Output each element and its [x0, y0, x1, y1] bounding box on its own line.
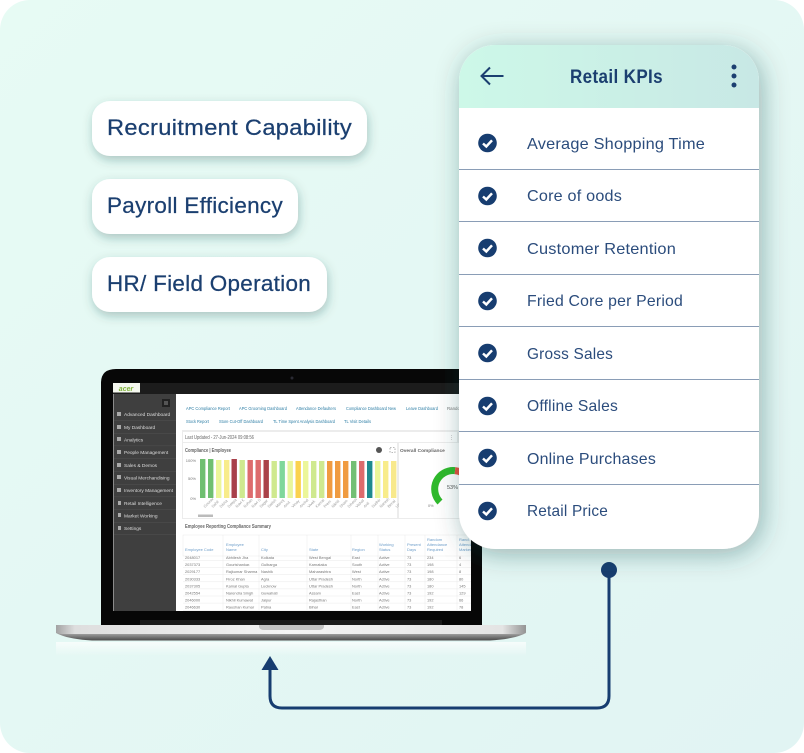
compliance bar chart card [183, 443, 404, 518]
logo: acer [119, 386, 134, 393]
compliance bar chart card: 100% [186, 458, 196, 463]
tabs: Leave Dashboard [406, 406, 439, 411]
rotated axis labels: Anil [363, 501, 370, 509]
list item: Online Purchases [478, 449, 656, 468]
employee compliance table: 192 [427, 598, 434, 603]
rotated axis labels: Nikhil [331, 499, 340, 509]
employee compliance table: Narendra Singh [226, 590, 253, 596]
employee compliance table: Present [407, 542, 422, 547]
list item: Offline Sales [478, 397, 618, 415]
employee compliance table: Rajkumar Sharma [226, 569, 258, 574]
list item: Average Shopping Time [478, 134, 705, 153]
employee compliance table: 73 [407, 555, 411, 560]
employee compliance table: 73 [407, 605, 411, 610]
employee compliance table: Days [407, 547, 416, 552]
rotated axis labels: Deepa [227, 497, 238, 509]
employee compliance table: Employee Code [185, 547, 214, 552]
employee compliance table: State [309, 547, 319, 552]
employee compliance table: 73 [407, 569, 411, 574]
logo [112, 383, 140, 393]
dashboard screen [112, 383, 480, 611]
employee compliance table: Random [427, 537, 443, 542]
list item: Online Purchases: Online Purchases [527, 451, 656, 468]
employee compliance table: Agra [261, 576, 270, 581]
employee compliance table: North [352, 576, 362, 581]
pill: Payroll Efficiency [92, 179, 298, 234]
employee compliance table: 2037373 [185, 562, 200, 567]
overall compliance gauge card: Overall Compliance [400, 448, 445, 454]
icon: back arrow [482, 68, 504, 84]
employee compliance table: Patna [261, 605, 272, 610]
pill: Recruitment Capability: Recruitment Capability [107, 115, 352, 140]
rotated axis labels: Arvind [299, 498, 309, 509]
employee compliance table: Active [379, 555, 390, 560]
sidebar: Settings [124, 526, 142, 532]
top bar [113, 383, 471, 394]
employee compliance table: 129 [459, 590, 466, 596]
rotated axis labels: Sagar [259, 498, 269, 509]
sidebar: Sales & Demos [124, 463, 158, 469]
employee compliance table: 2030333 [185, 576, 200, 581]
employee compliance table: Rajasthan [309, 598, 327, 603]
employee compliance table: 2046630 [185, 605, 201, 610]
laptop hinge strip [140, 620, 442, 625]
list item: Offline Sales: Offline Sales [527, 398, 618, 415]
list item: Customer Retention: Customer Retention [527, 241, 676, 258]
sidebar: Market Working [124, 514, 158, 520]
employee compliance table: Active [379, 562, 390, 567]
overall compliance gauge card: 0% [428, 504, 434, 508]
list item: Customer Retention [478, 239, 676, 258]
employee compliance table: 2048017 [185, 555, 200, 560]
employee compliance table: 145 [459, 583, 466, 588]
rotated axis labels: Ravi K [235, 498, 246, 509]
rotated axis labels: Vinay [291, 499, 300, 509]
employee compliance table: 2042554 [185, 590, 201, 596]
last updated bar [183, 432, 457, 442]
tabs: Compliance Dashboard New [346, 406, 397, 411]
list item: Core of oods: Core of oods [527, 188, 622, 205]
employee compliance table: 198 [427, 569, 434, 574]
pill: Payroll Efficiency: Payroll Efficiency [107, 193, 283, 218]
employee compliance table [182, 519, 480, 611]
employee compliance table: 2046000 [185, 598, 201, 603]
employee compliance table: Kolkata [261, 555, 275, 560]
rotated axis labels: Naresh [379, 497, 390, 509]
list item: Retail Price [478, 502, 608, 520]
rotated axis labels: Gourav [203, 497, 215, 509]
employee compliance table: Attendance [459, 542, 480, 547]
employee compliance table: Guwahati [261, 590, 278, 596]
tabs: Attendance Defaulters [296, 406, 337, 411]
employee compliance table: East [352, 605, 361, 610]
list item: Retail Price: Retail Price [527, 503, 608, 520]
icon: menu dots [732, 64, 736, 88]
employee compliance table: 180 [427, 576, 434, 581]
sidebar: My Dashboard [124, 425, 156, 431]
rotated axis labels: Sham [339, 499, 349, 509]
tabs: TL Time Spent Analysis Dashboard [273, 419, 335, 424]
employee compliance table: Name [226, 547, 237, 552]
rotated axis labels: Satish [267, 498, 277, 509]
rotated axis labels: Dinesh [347, 498, 358, 509]
tabs: Stock Report [186, 419, 210, 424]
employee compliance table: Kamal Gupta [226, 583, 250, 588]
employee compliance table: Bihar [309, 605, 319, 610]
employee compliance table: North [352, 583, 362, 588]
employee compliance table: 192 [427, 605, 434, 610]
employee compliance table: Assam [309, 590, 321, 596]
last updated bar: Last Updated - 27-Jun-2024 09:08:56 [185, 435, 254, 441]
employee compliance table: East [352, 555, 361, 560]
last updated bar: ⋮ [449, 435, 454, 441]
tabs: Random [447, 406, 464, 411]
employee compliance table: Active [379, 605, 390, 610]
panel: Retail KPIs card [459, 45, 759, 549]
employee compliance table: Uttar Pradesh [309, 576, 333, 581]
employee compliance table: Jaipur [261, 598, 272, 603]
employee compliance table: Employee Reporting Compliance Summary [185, 524, 271, 530]
list item: Fried Core per Period [478, 292, 683, 310]
employee compliance table: Employee [226, 542, 245, 547]
sidebar: Retail Intelligence [124, 501, 162, 507]
employee compliance table: Gulbarga [261, 562, 278, 567]
rotated axis labels: Sudhir [371, 498, 382, 509]
compliance bar chart card: Compliance | Employee [185, 448, 231, 454]
employee compliance table: West [352, 569, 362, 574]
employee compliance table: Marked [459, 547, 472, 552]
employee compliance table: 180 [427, 583, 434, 588]
tabs: APC Grooming Dashboard [239, 406, 288, 411]
list item: Average Shopping Time: Average Shopping Time [527, 136, 705, 153]
sidebar [113, 394, 176, 611]
employee compliance table: Region [352, 547, 365, 552]
laptop with dashboard [56, 369, 526, 656]
laptop base [56, 625, 526, 656]
sidebar: Analytics [124, 438, 144, 444]
employee compliance table: South [352, 562, 362, 567]
sidebar: Inventory Management [124, 488, 174, 494]
compliance bar chart card: 0% [190, 496, 196, 501]
compliance bar chart card: 50% [188, 476, 196, 481]
employee compliance table: Working [379, 542, 394, 547]
sidebar: Advanced Dashboard [124, 412, 170, 418]
pill: Recruitment Capability [92, 101, 367, 156]
employee compliance table: 4 [459, 562, 462, 567]
tabs [186, 406, 464, 424]
employee compliance table: 198 [427, 562, 434, 567]
employee compliance table: Active [379, 583, 390, 588]
card title: Retail KPIs [570, 67, 663, 88]
employee compliance table: 192 [427, 590, 434, 596]
employee compliance table: Uttar Pradesh [309, 583, 333, 588]
rotated axis labels [204, 498, 399, 508]
list item: Gross Sales [478, 344, 613, 363]
employee compliance table: 73 [407, 590, 411, 596]
connector arrow from KPI card to laptop [262, 562, 617, 708]
cloud icon [376, 447, 382, 453]
employee compliance table: 2037305 [185, 583, 200, 588]
rotated axis labels: Vishal [355, 499, 365, 509]
list item: Fried Core per Period: Fried Core per Period [527, 293, 683, 310]
employee compliance table: 6 [459, 555, 461, 560]
employee compliance table: West Bengal [309, 555, 331, 560]
employee compliance table: East [352, 590, 361, 596]
employee compliance table: Active [379, 569, 390, 574]
employee compliance table: Active [379, 590, 390, 596]
employee compliance table: 80 [459, 576, 464, 581]
employee compliance table: Nikhil Kumawat [226, 598, 254, 603]
employee compliance table: Raushan Kumar [226, 605, 255, 610]
employee compliance table: 234 [427, 555, 434, 560]
overall compliance gauge card: 53% [447, 485, 458, 491]
employee compliance table: Active [379, 576, 390, 581]
pill: HR/ Field Operation [92, 257, 327, 312]
employee compliance table: 78 [459, 605, 463, 610]
pill: HR/ Field Operation: HR/ Field Operation [107, 271, 311, 296]
employee compliance table: Abhilesh Jha [226, 555, 249, 560]
employee compliance table: 8 [459, 569, 461, 574]
sidebar: People Management [124, 450, 169, 456]
overall compliance gauge card [399, 443, 460, 518]
rotated axis labels: Disha [219, 498, 229, 509]
employee compliance table: Karnataka [309, 562, 328, 567]
card header [459, 45, 759, 108]
laptop bezel [101, 369, 482, 625]
employee compliance table: 66 [459, 598, 463, 603]
rotated axis labels: Amit [283, 500, 292, 509]
rotated axis labels: Ravi S [251, 498, 262, 509]
tabs: TL Visit Details [344, 419, 372, 424]
employee compliance table: Lucknow [261, 583, 277, 588]
rotated axis labels: Rohan [243, 498, 254, 509]
employee compliance table: Status [379, 547, 390, 552]
employee compliance table: Active [379, 598, 390, 603]
employee compliance table: 2029177 [185, 569, 200, 574]
tabs: Store Cut-Off Dashboard [219, 419, 264, 424]
employee compliance table: 73 [407, 583, 411, 588]
rotated axis labels: Vivek [307, 499, 316, 509]
employee compliance table: 73 [407, 562, 411, 567]
rotated axis labels: Sahil [211, 500, 220, 509]
bars [200, 459, 396, 498]
employee compliance table: City [261, 547, 268, 552]
employee compliance table: North [352, 598, 362, 603]
employee compliance table: 73 [407, 576, 411, 581]
sidebar: Visual Merchandising [124, 476, 170, 482]
rotated axis labels: Uma [395, 500, 404, 509]
employee compliance table: Nashik [261, 569, 273, 574]
rotated axis labels: Bimal [387, 499, 397, 509]
list item: Core of oods [478, 187, 622, 205]
employee compliance table: Firoz Khan [226, 576, 245, 581]
rotated axis labels: Manoj [275, 498, 285, 509]
content background [182, 430, 460, 519]
employee compliance table: Gourishankar. [226, 562, 250, 567]
employee compliance table: Attendance [427, 542, 448, 547]
rotated axis labels: Kamal [315, 498, 325, 509]
employee compliance table: 73 [407, 598, 411, 603]
tabs: APC Compliance Report [186, 406, 231, 411]
employee compliance table: Required [427, 547, 443, 552]
list item: Gross Sales: Gross Sales [527, 346, 613, 363]
employee compliance table: Maharashtra [309, 569, 332, 574]
rotated axis labels: Prem [323, 499, 332, 509]
camera [290, 376, 294, 380]
employee compliance table: Rand. [459, 537, 470, 542]
